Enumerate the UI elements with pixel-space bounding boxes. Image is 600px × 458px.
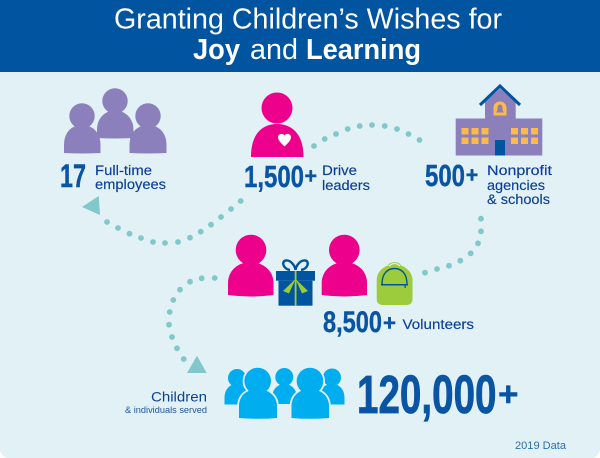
stat: 1,500+ drive leaders: 1,500 — [244, 159, 304, 194]
stat: 1,500+ drive leaders: + — [304, 164, 317, 188]
icon: volunteer right — [322, 235, 367, 296]
stat: 17 full-time employees: employees — [95, 177, 166, 192]
title: Learning — [306, 34, 421, 66]
stat: 500+ nonprofit agencies and schools: Nonprofit — [487, 163, 552, 178]
icon: backpack — [377, 262, 412, 305]
label: children and individuals served: & individuals served — [125, 405, 207, 415]
stat: 500+ nonprofit agencies and schools: & schools — [487, 192, 550, 207]
front row — [239, 368, 329, 419]
stat: 500+ nonprofit agencies and schools: 500 — [425, 158, 465, 193]
label: children and individuals served — [125, 389, 207, 415]
arrowhead: children — [187, 356, 207, 373]
windows — [462, 128, 538, 144]
icon: gift box — [276, 260, 315, 306]
stat: 500+ nonprofit agencies and schools: agencies — [487, 178, 545, 193]
door — [495, 140, 505, 156]
icon: group of children — [224, 368, 344, 419]
dotted path: volunteers to agencies — [422, 216, 484, 276]
arrowhead: employees — [82, 196, 100, 215]
bell — [494, 102, 506, 116]
icon: heart — [278, 134, 291, 146]
dotted path: drive leaders to employees — [104, 198, 244, 246]
dotted path: children to volunteers — [166, 275, 218, 362]
title: and — [250, 34, 298, 66]
stat: 500+ nonprofit agencies and schools — [425, 158, 552, 207]
stat: 17 full-time employees: Full-time — [95, 163, 152, 178]
icon: three employees — [64, 88, 166, 154]
title: Joy — [193, 34, 240, 66]
stat: 120,000+: + — [498, 376, 518, 414]
label: children and individuals served: Children — [151, 389, 207, 405]
title — [114, 4, 502, 66]
roof — [480, 86, 520, 105]
back row — [224, 368, 344, 404]
stat: 8,500+ volunteers: 8,500 — [323, 306, 382, 339]
icon: drive leader with heart — [251, 92, 304, 157]
icon: school building — [456, 86, 542, 156]
stat: 1,500+ drive leaders: leaders — [322, 178, 370, 193]
stat: 8,500+ volunteers: Volunteers — [402, 317, 474, 332]
title: Granting Children’s Wishes for — [114, 4, 502, 36]
stat: 1,500+ drive leaders: Drive — [322, 163, 357, 178]
stat: 17 full-time employees: 17 — [60, 158, 86, 194]
stat: 500+ nonprofit agencies and schools: + — [466, 162, 478, 188]
stat: 8,500+ volunteers — [323, 306, 474, 339]
data year note: 2019 Data — [515, 440, 567, 452]
stat: 17 full-time employees — [60, 158, 166, 194]
stat: 1,500+ drive leaders — [244, 159, 370, 194]
stat: 8,500+ volunteers: + — [383, 310, 396, 336]
icon: volunteer left — [228, 235, 274, 296]
front row outline — [239, 368, 329, 418]
dotted path: agencies to drive leaders — [311, 122, 422, 149]
stat: 120,000+: 120,000 — [357, 365, 496, 425]
header banner — [0, 0, 600, 72]
